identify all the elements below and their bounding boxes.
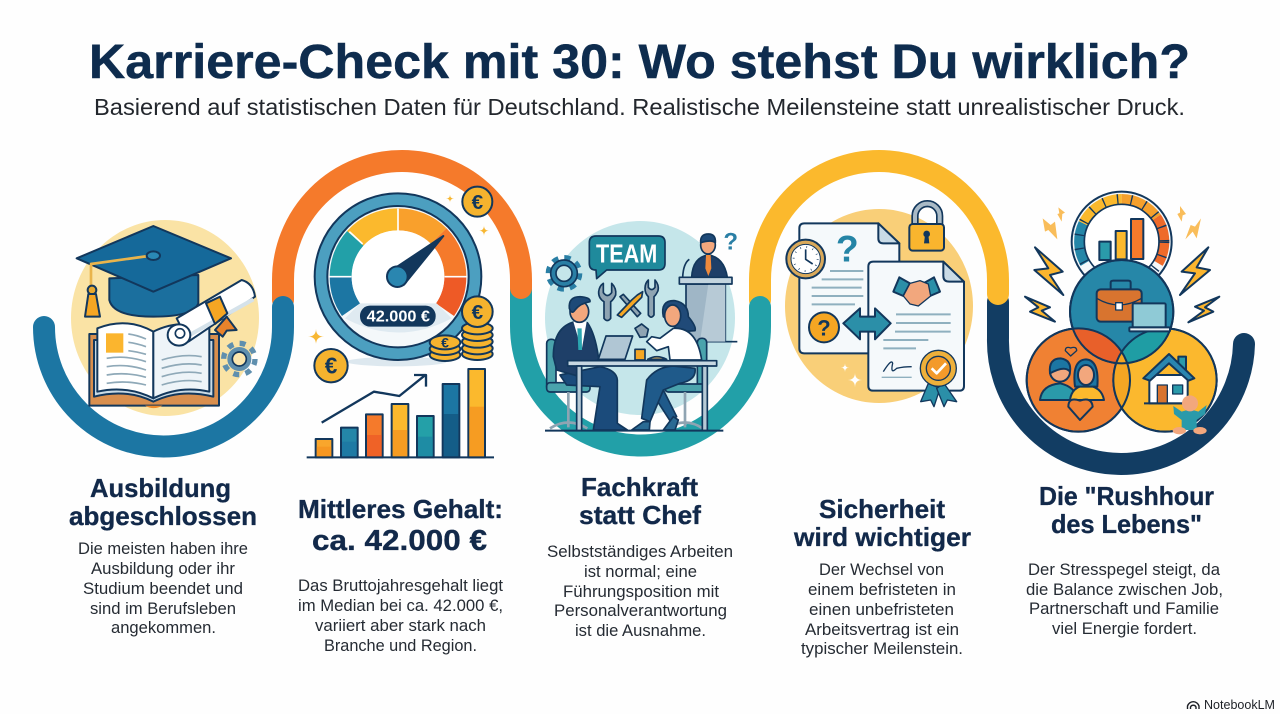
body text: viel Energie fordert. (1052, 619, 1197, 638)
icon: fixed-term contract (799, 223, 899, 353)
body text: im Median bei ca. 42.000 €, (298, 596, 503, 615)
body text (547, 542, 733, 640)
body text: ist die Ausnahme. (575, 621, 706, 640)
icon: coins: € (325, 353, 338, 379)
step 2 text (298, 494, 503, 655)
arrow: double-headed (843, 308, 891, 339)
body text: Der Stresspegel steigt, da (1028, 560, 1221, 579)
flowing ribbon path (44, 161, 1244, 464)
body text: einen unbefristeten (809, 600, 954, 619)
body text: ist normal; eine (584, 562, 697, 581)
body text: Personalverantwortung (554, 601, 727, 620)
heading: Sicherheit wird wichtiger: wird wichtiger (793, 522, 971, 552)
step 5 text (1026, 481, 1223, 638)
icon: handshake (893, 277, 940, 306)
heading: Sicherheit wird wichtiger: Sicherheit (819, 494, 945, 524)
icon: sparkles (841, 363, 862, 387)
NotebookLM logo: NotebookLM (1204, 697, 1275, 712)
body text: Studium beendet und (83, 579, 243, 598)
icon: gear (548, 258, 580, 289)
body text: Ausbildung oder ihr (91, 559, 235, 578)
bar chart (307, 369, 494, 457)
body text: Führungsposition mit (563, 582, 719, 601)
icon: padlock (909, 204, 944, 251)
icon: stress gauge (1072, 192, 1172, 292)
body text (1026, 560, 1223, 638)
icon: venn circles job, family, home (1027, 260, 1217, 432)
icon: fixed-term contract: ? (836, 228, 859, 270)
body text: angekommen. (111, 618, 216, 637)
body text: einem befristeten in (808, 580, 956, 599)
icon: couple (1040, 347, 1104, 420)
subtitle: Basierend auf statistischen Daten für Deutschland. Realistische Meilensteine statt unrealistischer Druck. (94, 94, 1185, 120)
heading: Mittleres Gehalt: Mittleres Gehalt: (298, 494, 503, 524)
icon: lightning bolts (1025, 206, 1219, 322)
heading: Fachkraft statt Chef (579, 472, 701, 530)
icon: clock (786, 240, 825, 278)
illustration: team at a desk and leader at podium (545, 228, 738, 431)
icon: coins: € (441, 334, 449, 350)
heading: Fachkraft statt Chef: statt Chef (579, 500, 701, 530)
heading: Die Rushhour des Lebens: des Lebens" (1051, 509, 1202, 539)
icon: gear (224, 343, 255, 375)
icon: briefcase (1097, 281, 1142, 322)
icon: question badge (809, 312, 839, 342)
icon: coins: € (472, 301, 484, 324)
icon: house (1143, 354, 1194, 403)
heading: Sicherheit wird wichtiger (793, 494, 971, 552)
body text (801, 560, 963, 658)
illustration: salary gauge, coins, bar chart (307, 187, 494, 457)
icon: gauge (315, 193, 481, 360)
heading: Mittleres Gehalt (298, 494, 503, 557)
heading: Mittleres Gehalt: ca. 42.000 € (312, 525, 487, 557)
icon: coins (314, 187, 493, 382)
body text (78, 539, 248, 637)
body text: variiert aber stark nach (315, 616, 486, 635)
body text: Partnerschaft und Familie (1029, 599, 1219, 618)
heading: Ausbildung abgeschlossen (69, 473, 257, 531)
body text: Das Bruttojahresgehalt liegt (298, 576, 503, 595)
icon: graduation cap (77, 226, 231, 317)
body text: Die meisten haben ihre (78, 539, 248, 558)
illustration: graduation cap, book, diploma (77, 226, 255, 408)
icon: seated man (547, 297, 627, 430)
shadow under gauge (347, 357, 447, 366)
body text: die Balance zwischen Job, (1026, 580, 1223, 599)
icon: open book (89, 323, 219, 408)
body text: Selbstständiges Arbeiten (547, 542, 733, 561)
icon: coins: € (472, 191, 484, 214)
illustration: contracts, lock, handshake (786, 204, 964, 407)
icon: seated woman (632, 301, 707, 430)
icon: tools (599, 280, 658, 320)
icon: gauge: 42.000 € (367, 308, 430, 325)
body text (298, 576, 503, 655)
icon: TEAM speech bubble: TEAM (596, 239, 657, 269)
illustration: work-life balance (1025, 192, 1219, 434)
icon: question badge: ? (817, 315, 831, 340)
icon: mug (635, 349, 645, 360)
body text: sind im Berufsleben (90, 599, 236, 618)
icon: baby (1173, 395, 1207, 434)
icon: diploma scroll (168, 280, 255, 346)
icon: TEAM speech bubble (589, 236, 665, 279)
icon: leader at podium (679, 228, 738, 342)
icon: laptop (598, 336, 633, 359)
icon: illustration background circles (71, 209, 973, 416)
icon: leader at podium: ? (723, 228, 738, 255)
body text: Der Wechsel von (819, 560, 944, 579)
body text: Arbeitsvertrag ist ein (805, 620, 959, 639)
desk (545, 357, 723, 431)
heading: Die Rushhour des Lebens: Die "Rushhour (1039, 481, 1214, 511)
heading: Fachkraft statt Chef: Fachkraft (581, 472, 698, 502)
arrow: rising trend (322, 375, 426, 423)
body text: Branche und Region. (324, 636, 477, 655)
step 4 text (793, 494, 971, 658)
step 1 text (69, 473, 257, 637)
heading: Ausbildung abgeschlossen: abgeschlossen (69, 501, 257, 531)
icon: sparkles (308, 195, 489, 345)
icon: permanent contract (868, 262, 964, 391)
title: Karriere-Check mit 30: Wo stehst Du wirklich? (89, 36, 1190, 89)
heading: Die Rushhour des Lebens (1039, 481, 1214, 539)
icon: laptop (1129, 303, 1170, 331)
icon: seal (920, 350, 957, 407)
body text: typischer Meilenstein. (801, 639, 963, 658)
step 3 text (547, 472, 733, 640)
heading: Ausbildung abgeschlossen: Ausbildung (90, 473, 231, 503)
